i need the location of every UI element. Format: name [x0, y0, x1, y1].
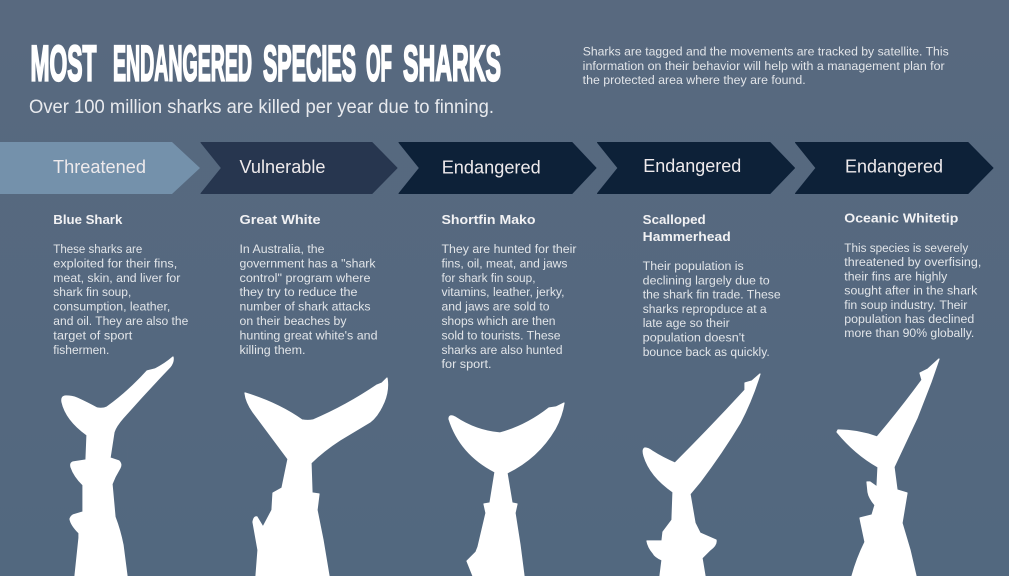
- heading: shortfin mako: Shortfin Mako: [442, 212, 536, 227]
- text block: shortfin mako: They are hunted for their: [442, 242, 576, 256]
- text block: blue shark: fishermen.: [53, 343, 109, 357]
- text block: oceanic whitetip: [844, 241, 981, 340]
- panel: shortfin mako: [399, 142, 596, 576]
- text block: great white: number of shark attacks: [240, 300, 370, 314]
- title: ENDANGERED: [113, 36, 252, 92]
- text block: blue shark: consumption, leather,: [53, 300, 170, 314]
- text block: shortfin mako: vitamins, leather, jerky,: [442, 285, 564, 299]
- text block: shortfin mako: for shark fin soup,: [442, 271, 536, 285]
- text block: shortfin mako: for sport.: [442, 357, 492, 371]
- status label: endangered: Endangered: [845, 156, 943, 177]
- text block: scalloped hammerhead: [643, 259, 781, 359]
- text block: scalloped hammerhead: bounce back as quickly.: [643, 345, 770, 359]
- icon: scalloped hammerhead tail silhouette: [643, 374, 760, 576]
- heading: blue shark: Blue Shark: [53, 212, 123, 227]
- status arrow: endangered: [796, 142, 993, 194]
- text block: scalloped hammerhead: the shark fin trade. These: [643, 288, 781, 302]
- text block: satellite tagging note: information on their behavior will help with a management plan for: [583, 59, 945, 73]
- text block: scalloped hammerhead: declining largely due to: [643, 273, 770, 287]
- status arrow: threatened: [0, 142, 200, 194]
- text block: blue shark: target of sport: [53, 328, 133, 342]
- text: SHARKS: [403, 36, 501, 92]
- panel: great white: [201, 142, 397, 576]
- status label: endangered: Endangered: [442, 156, 541, 177]
- text block: great white: on their beaches by: [240, 314, 347, 328]
- text block: oceanic whitetip: fin soup industry. Their: [844, 298, 967, 312]
- panel: scalloped hammerhead: [598, 142, 794, 576]
- text block: oceanic whitetip: more than 90% globally.: [844, 326, 974, 340]
- text block: great white: [240, 242, 378, 357]
- panel: oceanic whitetip: [796, 142, 993, 576]
- subtitle: Over 100 million sharks are killed per year due to finning.: [29, 96, 494, 118]
- text block: blue shark: and oil. They are also the: [53, 314, 188, 328]
- text block: oceanic whitetip: threatened by overfising,: [844, 255, 981, 269]
- icon: oceanic whitetip tail silhouette: [837, 359, 939, 576]
- text block: blue shark: [53, 242, 188, 357]
- panel: blue shark: [0, 142, 200, 576]
- text block: shortfin mako: sold to tourists. These: [442, 328, 561, 342]
- text block: scalloped hammerhead: late age so their: [643, 316, 730, 330]
- text block: great white: they try to reduce the: [240, 285, 358, 299]
- text block: great white: killing them.: [240, 343, 306, 357]
- text block: shortfin mako: sharks are also hunted: [442, 343, 563, 357]
- text block: satellite tagging note: the protected area where they are found.: [583, 73, 806, 87]
- text block: shortfin mako: shops which are then: [442, 314, 556, 328]
- text block: shortfin mako: and jaws are sold to: [442, 300, 550, 314]
- icon: blue shark tail silhouette: [62, 357, 173, 576]
- text block: blue shark: These sharks are: [53, 242, 142, 256]
- text block: great white: In Australia, the: [240, 242, 325, 256]
- icon: great white tail silhouette: [245, 378, 388, 576]
- text block: great white: hunting great white's and: [240, 328, 378, 342]
- text block: blue shark: shark fin soup,: [53, 285, 131, 299]
- heading: scalloped hammerhead: Hammerhead: [643, 229, 731, 244]
- text block: great white: control" program where: [240, 271, 371, 285]
- text block: blue shark: exploited for their fins,: [53, 256, 177, 270]
- text block: scalloped hammerhead: sharks repropduce at a: [643, 302, 767, 316]
- text block: oceanic whitetip: population has declined: [844, 312, 974, 326]
- text block: blue shark: meat, skin, and liver for: [53, 271, 180, 285]
- heading: scalloped hammerhead: [643, 212, 731, 244]
- text block: scalloped hammerhead: population doesn't: [643, 330, 745, 344]
- text block: shortfin mako: [442, 242, 576, 371]
- heading: great white: Great White: [240, 212, 320, 227]
- title: MOST: [30, 36, 96, 92]
- status label: endangered: Endangered: [643, 155, 741, 176]
- text block: satellite tagging note: Sharks are tagged and the movements are tracked by satellite. This: [583, 45, 949, 59]
- text block: oceanic whitetip: This species is severely: [844, 241, 969, 255]
- text block: oceanic whitetip: their fins are highly: [844, 269, 948, 283]
- status label: vulnerable: Vulnerable: [240, 156, 326, 177]
- text block: scalloped hammerhead: Their population is: [643, 259, 744, 273]
- title: OF: [366, 36, 392, 92]
- icon: shortfin mako tail silhouette: [449, 403, 564, 576]
- heading: oceanic whitetip: Oceanic Whitetip: [844, 211, 958, 226]
- status arrow: endangered: [399, 142, 596, 194]
- text block: great white: government has a "shark: [240, 256, 376, 270]
- heading: scalloped hammerhead: Scalloped: [643, 212, 706, 227]
- title: SPECIES: [263, 36, 356, 92]
- status arrow: endangered: [598, 142, 794, 194]
- text block: satellite tagging note: [583, 45, 949, 87]
- status arrow: vulnerable: [201, 142, 397, 194]
- text block: shortfin mako: fins, oil, meat, and jaws: [442, 256, 568, 270]
- status label: threatened: Threatened: [53, 156, 146, 177]
- text block: oceanic whitetip: sought after in the shark: [844, 284, 978, 298]
